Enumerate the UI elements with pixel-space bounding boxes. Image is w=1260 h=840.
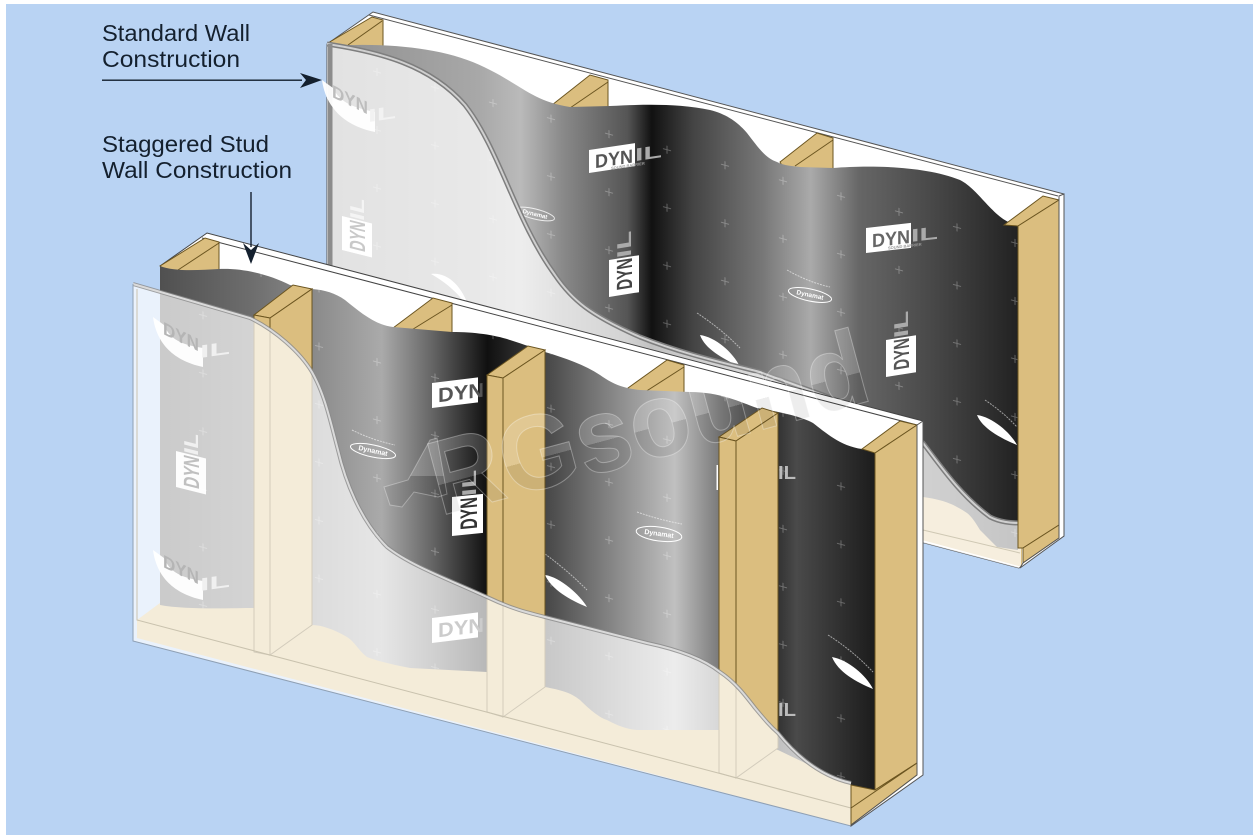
faded logo: curved top [153,317,230,367]
heading: Standard Wall Construction: Standard Wall [102,20,250,46]
logo: DYNIL horizontal 1: DYN [595,147,633,173]
heading: Staggered Stud Wall Construction [102,131,292,183]
panel: staggered stud wall [133,233,923,826]
logo: DYNIL horizontal 2: IL [911,223,938,246]
oval badges and crescents: Dynamat [522,209,548,221]
faded logo: curved bottom [153,550,230,600]
watermark lettering: RGsound [415,308,881,538]
sound barrier membrane [160,266,875,790]
heading: Standard Wall Construction [102,20,250,72]
standard wall drywall panel [327,44,1021,568]
stud 3 [780,133,833,180]
logo: DYNIL horizontal 1: SOUND BARRIER [611,161,645,171]
white end strip [851,421,923,826]
logo: DYNIL vertical [452,469,483,536]
faded logo: vertical: DYN [345,218,370,254]
sound barrier membrane [327,45,1018,550]
logo: DYNIL vertical 2 [886,309,916,377]
heading: Staggered Stud Wall Construction: Wall Construction [102,157,292,183]
drywall cut edge [327,44,1021,523]
logo: DYNIL vertical: IL [459,469,481,497]
stud 2 [552,75,608,120]
stud end [851,421,917,825]
faded logo: curved: IL [368,102,396,126]
heading: Staggered Stud Wall Construction: Staggered Stud [102,131,269,157]
rear stud 3 [628,360,684,405]
watermark speaker mark [384,438,447,507]
front stud 2 [487,346,545,717]
bottom plate [137,570,875,826]
watermark: RGsound [384,308,881,538]
oval badges and crescents: Dynamat [644,529,675,540]
top plate edges [160,233,923,425]
logo: DYNIL horizontal: DYN [438,380,484,407]
logo: DYNIL horizontal 1: IL [635,141,662,165]
oval badges and crescents: Dynamat [358,445,389,458]
faded logo: curved top: DYN [163,319,199,356]
oval badges and crescents [514,204,1017,445]
logo: DYNIL horizontal 2: SOUND BARRIER [888,242,922,250]
logo: DYNIL vertical 2: DYN [889,337,914,371]
wall interior [160,233,923,826]
faded logo: curved bottom: IL [200,571,230,595]
oval badges and crescents [349,430,873,689]
rear stud 2 [393,298,452,345]
front stud 3 [719,408,778,778]
logo: DYNIL vertical 1: DYN [612,257,637,291]
wall interior and top plate [327,12,1064,568]
plate line [923,530,1020,553]
faded logo: curved: DYN [332,82,368,119]
bottom plate [700,430,1022,567]
white logo sliver [716,465,718,490]
faded logo: curved [322,80,396,132]
oval badges and crescents: Dynamat [796,289,825,302]
logo: DYNIL horizontal 2: DYN [872,227,910,252]
stud 1 [328,17,383,60]
faded logo: vertical: IL [347,195,369,223]
logo: DYNIL horizontal 1 [589,139,662,174]
rear stud 1 [160,238,219,280]
logo: DYNIL vertical 1: IL [614,230,636,259]
stud end [1004,196,1059,563]
front stud 1 [254,285,312,655]
logo fragment: upper: IL [778,463,796,483]
faded logo: vertical: IL [181,430,203,458]
logo fragment: lower: IL [778,700,796,720]
white end strip [1020,194,1064,568]
logo: DYNIL horizontal 2 [866,220,938,253]
arrow: standard wall [102,73,322,88]
arrow: staggered stud wall [243,192,259,264]
top plate inner line [369,15,1058,196]
faded crescent mark [431,274,470,310]
faded logo: curved top: IL [200,338,230,362]
faded logo: vertical [342,194,372,258]
logo: faded horizontal: DYN [438,615,484,642]
logo: DYNIL vertical: DYN [456,496,483,531]
faded logo: vertical: DYN [179,453,204,491]
faded logo: curved bottom: DYN [163,552,199,589]
panel: standard wall [322,12,1064,568]
logo: DYNIL vertical 1 [609,229,639,297]
logo: DYNIL vertical 2: IL [891,310,913,339]
heading: Standard Wall Construction: Construction [102,46,240,72]
faded logo: vertical [176,429,206,494]
drywall cut edge [133,284,851,826]
staggered wall drywall panel [133,284,851,826]
